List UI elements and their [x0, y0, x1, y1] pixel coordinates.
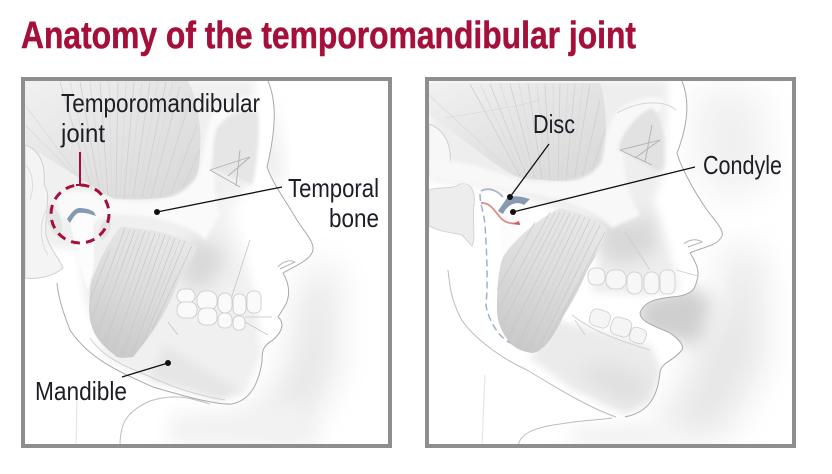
panel: open jaw: [427, 79, 794, 446]
label: Mandible: Mandible: [35, 376, 127, 406]
face fill: [630, 279, 696, 354]
label: Disc: Disc: [533, 109, 575, 139]
soft shading outside profile: [264, 130, 344, 418]
condyle and ramus: [480, 188, 530, 225]
temporal bone: [55, 94, 258, 240]
joint highlight circle: [51, 152, 109, 243]
eye orbit: [210, 111, 259, 187]
ear: [429, 124, 474, 246]
panel: closed jaw: [23, 79, 390, 446]
masseter muscle: [497, 208, 607, 353]
title: Anatomy of the temporomandibular joint: [21, 15, 636, 57]
label: Temporomandibular joint: joint: [60, 118, 106, 148]
temporal bone: [429, 97, 665, 228]
profile outline: [448, 81, 722, 417]
profile outline: [57, 81, 313, 404]
face fill: [260, 129, 273, 180]
label: Condyle: [510, 150, 782, 215]
masseter muscle: [89, 227, 197, 358]
teeth: [168, 240, 272, 335]
skull shading: [37, 82, 261, 401]
label: Temporomandibular joint: Temporomandibular: [61, 88, 260, 118]
label: Temporomandibular joint: [60, 88, 260, 148]
label: Condyle: Condyle: [703, 150, 782, 180]
temporal muscle: [429, 83, 606, 181]
label: Mandible: [35, 360, 171, 406]
eye orbit: [617, 103, 676, 171]
mandible lower border: [90, 338, 225, 400]
ear: [25, 145, 63, 278]
condyle and ramus: [46, 205, 111, 290]
skull shading: [429, 81, 705, 414]
label: Temporal bone: [154, 173, 379, 233]
temporal muscle: [25, 81, 200, 200]
label: Temporal bone: Temporal: [288, 173, 379, 203]
jaw rest position dashed outline: [480, 194, 513, 344]
neck: [76, 396, 246, 444]
soft shading outside profile: [636, 90, 770, 440]
neck: [482, 375, 644, 444]
label: Temporal bone: bone: [329, 203, 379, 233]
label: Disc: [507, 109, 575, 200]
upper teeth: [588, 232, 698, 294]
lower teeth: [572, 307, 650, 350]
